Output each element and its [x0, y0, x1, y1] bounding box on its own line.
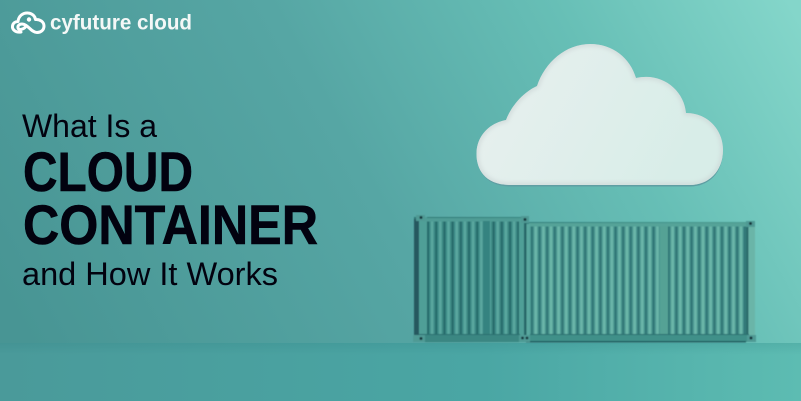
- icon: logo cloud: [12, 13, 44, 32]
- wordmark: cyfuture cloud: [50, 12, 192, 34]
- icon: 3D white cloud: [476, 44, 723, 186]
- container: left short: [414, 217, 530, 342]
- container corner castings: [413, 215, 756, 342]
- title line: CONTAINER: CONTAINER: [23, 193, 318, 256]
- floor: [0, 343, 801, 401]
- title text block: [22, 108, 318, 292]
- icon: logo leaf mark: [27, 17, 31, 22]
- shipping containers: [413, 215, 756, 342]
- logo: cyfuture cloud: [12, 12, 192, 34]
- title line: and How It Works: and How It Works: [22, 256, 278, 292]
- container: right long: [526, 222, 755, 342]
- title line: CLOUD: CLOUD: [23, 140, 193, 203]
- title line: What Is a: What Is a: [22, 108, 157, 144]
